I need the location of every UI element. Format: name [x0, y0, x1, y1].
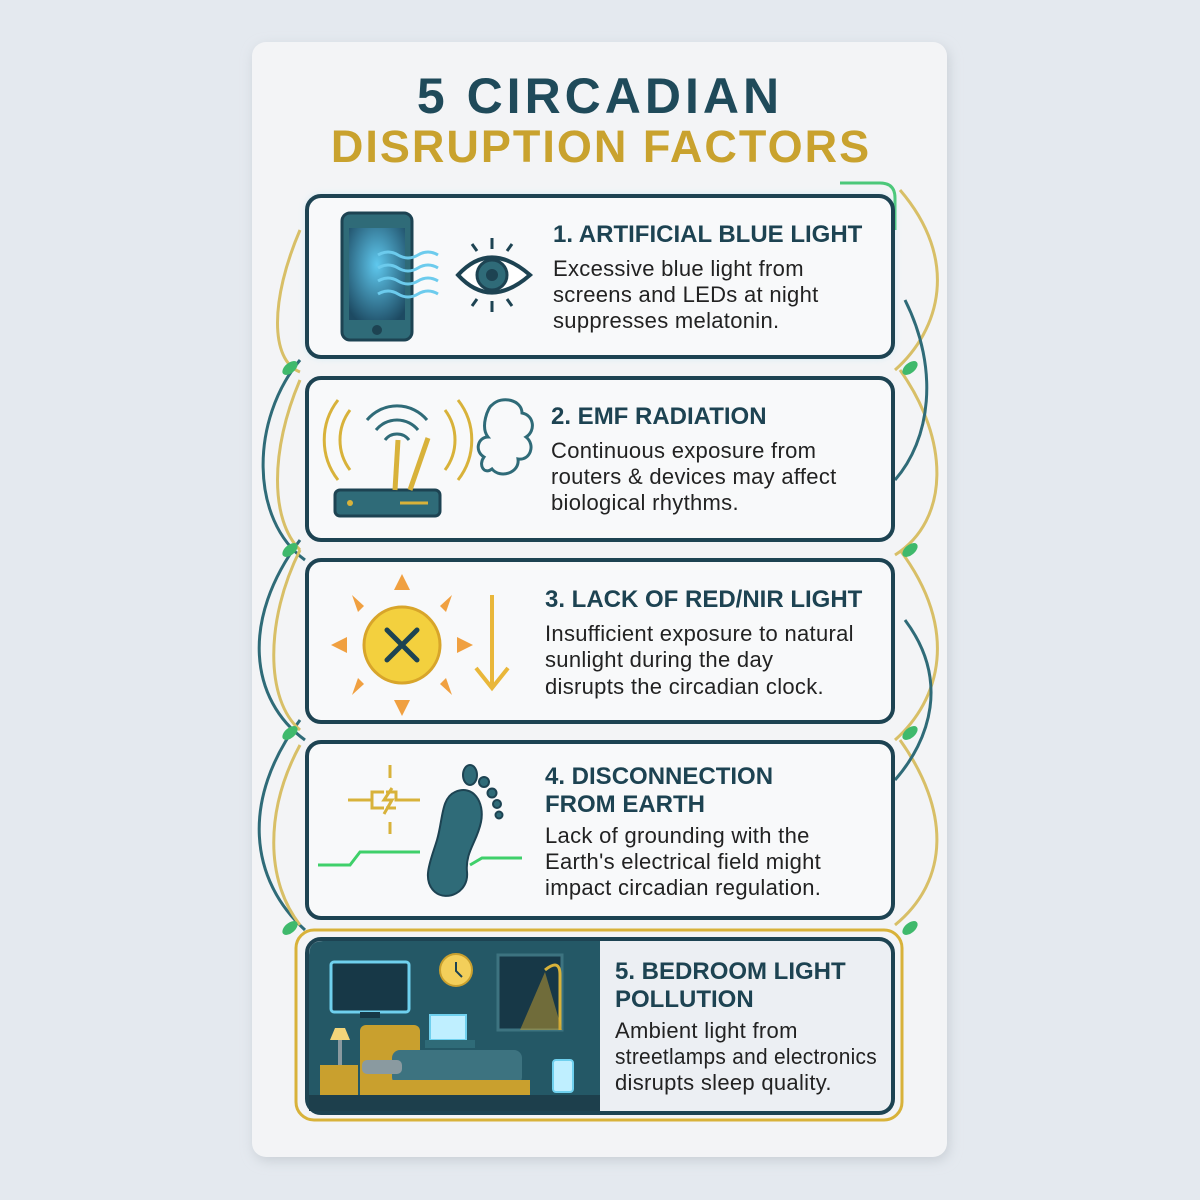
panel 2: EMF radiation: routers & devices may affect [551, 464, 837, 489]
icon: light waves [378, 252, 438, 297]
icon: phone [342, 213, 412, 340]
panel 4: disconnection from earth: Earth's electrical field might [545, 849, 821, 874]
panel 2: EMF radiation [307, 378, 893, 540]
panel 5: bedroom light pollution [296, 930, 902, 1120]
leaves [280, 358, 920, 938]
panel 1: artificial blue light [307, 196, 893, 357]
icon: crossed sun [331, 574, 473, 716]
panel 3: lack of red/NIR light: 3. LACK OF RED/NIR LIGHT [545, 586, 863, 613]
icon: down arrow [476, 595, 508, 688]
panel 1: artificial blue light: suppresses melatonin. [553, 308, 779, 333]
panel 5: bedroom light pollution: streetlamps and electronics [615, 1044, 877, 1069]
decorative vines [259, 183, 937, 930]
panel 2: EMF radiation: biological rhythms. [551, 490, 739, 515]
panel 3: lack of red/NIR light: sunlight during the day [545, 647, 773, 672]
panel 2: EMF radiation: Continuous exposure from [551, 438, 816, 463]
panel 2: EMF radiation: 2. EMF RADIATION [551, 403, 767, 430]
panel 4: disconnection from earth: Lack of grounding with the [545, 823, 810, 848]
panel 5: bedroom light pollution: 5. BEDROOM LIGHT [615, 958, 846, 985]
card [252, 42, 949, 1161]
title: 5 CIRCADIAN [417, 68, 783, 124]
icon: green ground line [318, 852, 522, 865]
title [331, 68, 871, 172]
panel 4: disconnection from earth [307, 742, 893, 918]
icon: footprint [428, 765, 502, 896]
panel 5: bedroom light pollution: disrupts sleep quality. [615, 1070, 832, 1095]
panel 3: lack of red/NIR light: Insufficient exposure to natural [545, 621, 854, 646]
icon: eye [458, 238, 530, 312]
panel 4: disconnection from earth: FROM EARTH [545, 791, 705, 818]
panel 1: artificial blue light: 1. ARTIFICIAL BLUE LIGHT [553, 221, 863, 248]
panel 4: disconnection from earth: impact circadian regulation. [545, 875, 821, 900]
panel 3: lack of red/NIR light: disrupts the circadian clock. [545, 674, 824, 699]
panel 1: artificial blue light: screens and LEDs at night [553, 282, 819, 307]
panel 1: artificial blue light: Excessive blue light from [553, 256, 804, 281]
icon: router with waves and brain [324, 400, 532, 516]
panel 3: lack of red/NIR light [307, 560, 893, 722]
icon: broken plug [348, 765, 420, 834]
panel 5: bedroom light pollution: POLLUTION [615, 986, 754, 1013]
illustration: bedroom [309, 941, 600, 1111]
panel 4: disconnection from earth: 4. DISCONNECTION [545, 763, 773, 790]
title: DISRUPTION FACTORS [331, 121, 871, 172]
panel 5: bedroom light pollution: Ambient light from [615, 1018, 798, 1043]
